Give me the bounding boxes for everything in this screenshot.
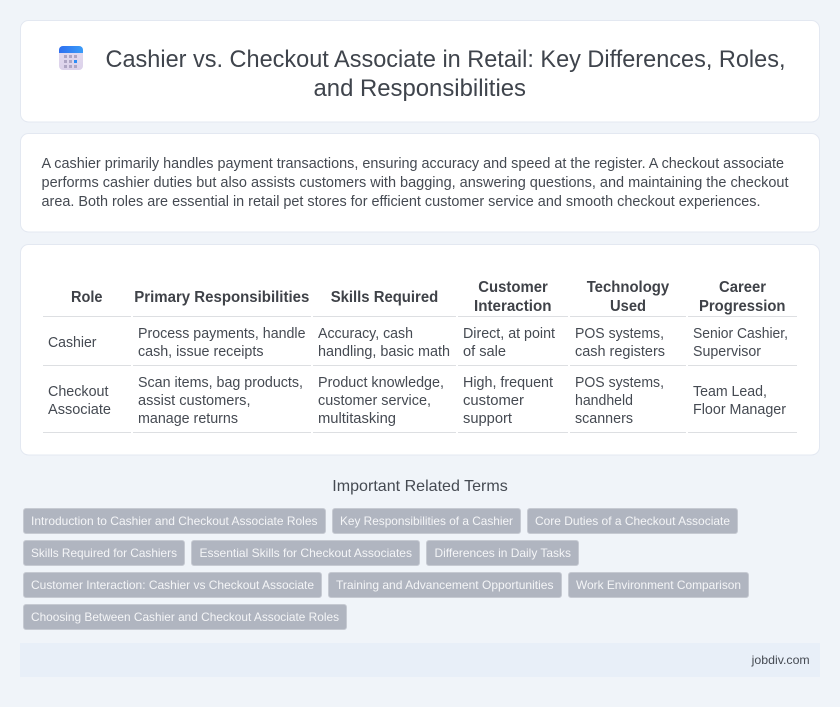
related terms tags: Choosing Between Cashier and Checkout Associate Roles [31,610,339,624]
related terms tags: Training and Advancement Opportunities [336,578,554,592]
table row: cashier: cash, issue receipts [138,344,264,360]
table header row: Skills Required [331,289,438,306]
table row: cashier: Process payments, handle [138,326,306,342]
table row: cashier: Direct, at point [463,326,555,342]
table row: checkout associate: customer service, [318,393,431,409]
table rules [43,316,797,433]
table row: cashier [48,326,788,360]
table header row: Career [719,279,766,296]
related terms tags: Core Duties of a Checkout Associate [535,514,730,528]
table row: checkout associate: High, frequent [463,375,553,391]
table row: checkout associate: POS systems, [575,375,664,391]
table row: checkout associate: Product knowledge, [318,375,444,391]
table row: checkout associate: Floor Manager [693,402,786,418]
table row: checkout associate: multitasking [318,411,396,427]
title [106,46,786,102]
table header row: Used [610,298,646,315]
panel: title header [20,20,820,122]
table row: cashier: Cashier [48,335,97,351]
table header row: Primary Responsibilities [134,289,309,306]
table header row: Interaction [474,298,552,315]
table row: checkout associate: Scan items, bag products, [138,375,303,391]
table row: cashier: of sale [463,344,506,360]
panel: intro paragraph [20,134,820,232]
title: Cashier vs. Checkout Associate in Retail: Key Differences, Roles, [106,46,786,73]
related terms tags: Work Environment Comparison [576,578,741,592]
table row: checkout associate [48,375,786,427]
related terms tags: Essential Skills for Checkout Associates [200,546,412,560]
table row: cashier: Senior Cashier, [693,326,788,342]
footer: jobdiv.com [751,653,810,667]
table row: checkout associate: Checkout [48,384,108,400]
table header row: Progression [699,298,786,315]
table row: cashier: POS systems, [575,326,664,342]
intro text [42,156,789,210]
related terms tags: Differences in Daily Tasks [434,546,571,560]
table row: checkout associate: customer [463,393,524,409]
heading: important related terms: Important Related Terms [332,478,508,495]
table header row: Role [71,289,103,306]
icon: calendar [59,46,83,70]
table row: checkout associate: Team Lead, [693,384,767,400]
table header row: Technology [587,279,670,296]
panel: comparison table [20,244,820,455]
table row: checkout associate: assist customers, [138,393,250,409]
intro text: performs cashier duties but also assists customers with bagging, answering questions, and maintaining the checkout [42,175,789,191]
table row: checkout associate: Associate [48,402,111,418]
title: and Responsibilities [314,75,526,102]
intro text: area. Both roles are essential in retail pet stores for efficient customer service and smooth checkout experiences. [42,194,760,210]
related terms tags [24,508,748,630]
related terms tags: Skills Required for Cashiers [31,546,177,560]
table header row [71,279,786,315]
table row: checkout associate: handheld [575,393,633,409]
related terms tags: Key Responsibilities of a Cashier [340,514,513,528]
related terms tags: Introduction to Cashier and Checkout Associate Roles [31,514,318,528]
table row: checkout associate: manage returns [138,411,238,427]
table row: checkout associate: support [463,411,512,427]
table header row: Customer [478,279,548,296]
table row: cashier: Supervisor [693,344,761,360]
footer [20,643,820,677]
related terms tags: Customer Interaction: Cashier vs Checkout Associate [31,578,314,592]
intro text: A cashier primarily handles payment transactions, ensuring accuracy and speed at the register. A checkout associate [42,156,784,172]
table row: cashier: cash registers [575,344,665,360]
table row: cashier: Accuracy, cash [318,326,413,342]
table row: checkout associate: scanners [575,411,633,427]
table row: cashier: handling, basic math [318,344,450,360]
